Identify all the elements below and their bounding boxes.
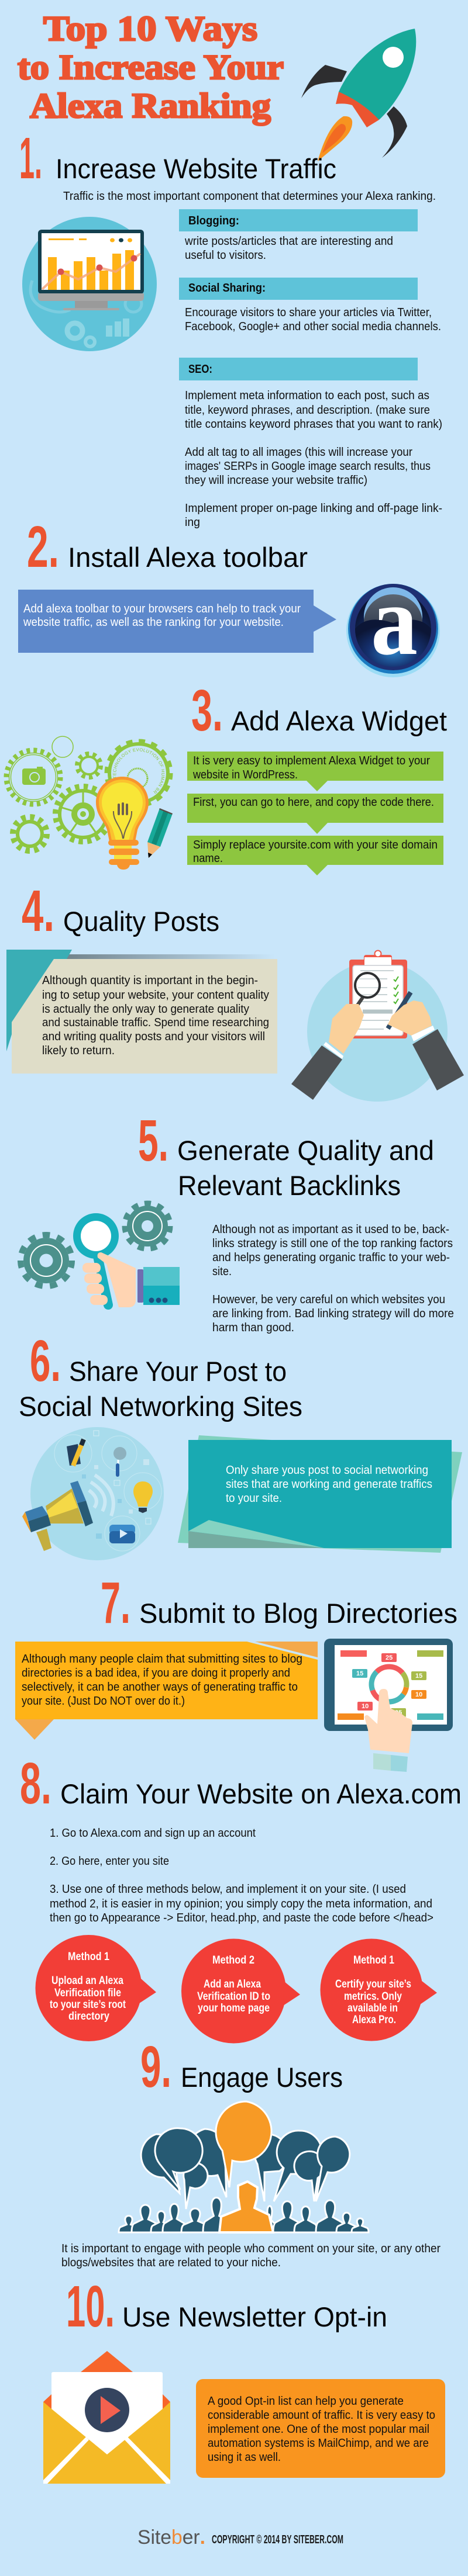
icon: envelope with video bbox=[43, 2351, 170, 2484]
heading: step 3 bbox=[191, 678, 447, 743]
panel: social sharing: Social Sharing: bbox=[188, 282, 266, 295]
callout: method 2 verification id: your home page bbox=[198, 2002, 270, 2014]
text: backlinks description: links strategy is still one of the top ranking factors bbox=[212, 1237, 453, 1250]
callout: method 2 verification id: Add an Alexa bbox=[204, 1978, 261, 1990]
heading: step 1 bbox=[19, 126, 336, 191]
callout: widget step 2: First, you can go to here, and copy the code there. bbox=[193, 796, 434, 809]
callout: method 1 certify: Certify your site’s bbox=[335, 1978, 411, 1990]
callout: install toolbar bbox=[18, 590, 336, 653]
callout: blog directories: your site. (Just Do NOT over do it.) bbox=[22, 1695, 185, 1708]
panel: quality posts note: likely to return. bbox=[42, 1044, 115, 1057]
heading: step 2: 2. bbox=[27, 514, 59, 580]
heading: step 9: 9. bbox=[140, 2034, 171, 2100]
heading: step 9: Engage Users bbox=[181, 2062, 343, 2093]
icon: tablet with chart and hand: 15 bbox=[415, 1673, 422, 1680]
text: backlinks description bbox=[212, 1223, 454, 1334]
footer: logo and copyright: Siteber. bbox=[137, 2526, 205, 2549]
text: engage users: blogs/websites that are related to your niche. bbox=[61, 2256, 281, 2269]
text: engage users: It is important to engage with people who comment on your site, or any other bbox=[61, 2242, 441, 2255]
callout: method 2 verification id bbox=[181, 1939, 300, 2043]
text: claim steps: then go to Appearance -> Editor, head.php, and paste the code before </head> bbox=[50, 1912, 433, 1924]
panel: quality posts note bbox=[6, 950, 277, 1074]
icon: gears and magnifier hand bbox=[20, 1203, 180, 1307]
icon: gears and light bulb bbox=[4, 736, 173, 870]
panel: quality posts note: Although quantity is important in the begin- bbox=[42, 974, 258, 987]
callout: opt-in: considerable amount of traffic. It is very easy to bbox=[208, 2409, 435, 2422]
callout: blog directories: directories is a bad idea, if you are doing it properly and bbox=[22, 1667, 290, 1680]
heading: step 6: 6. bbox=[30, 1328, 61, 1394]
callout: install toolbar: Add alexa toolbar to your browsers can help to track your bbox=[23, 603, 301, 615]
heading: step 5: Relevant Backlinks bbox=[178, 1170, 401, 1201]
panel: blogging: Blogging: bbox=[188, 214, 239, 227]
heading: step 1: 1. bbox=[19, 126, 42, 191]
callout: method 2 verification id: Verification ID to bbox=[197, 1990, 270, 2003]
heading: step 10: 10. bbox=[66, 2274, 115, 2339]
icon: megaphone with media icons bbox=[22, 1427, 164, 1560]
callout: method 1 upload: Upload an Alexa bbox=[51, 1975, 123, 1987]
heading: step 8 bbox=[20, 1751, 462, 1816]
text: claim steps: 3. Use one of three methods below, and implement it on your site. (I used bbox=[50, 1883, 406, 1896]
text: backlinks description: are linking from. Bad linking strategy will do more bbox=[212, 1307, 454, 1320]
callout: blog directories bbox=[15, 1642, 318, 1740]
heading: step 4: Quality Posts bbox=[63, 906, 219, 937]
text: backlinks description: and helps generating organic traffic to your web- bbox=[212, 1251, 450, 1264]
heading: step 7: 7. bbox=[101, 1570, 130, 1636]
text: backlinks description: Although not as important as it used to be, back- bbox=[212, 1223, 449, 1236]
callout: method 1 certify: Method 1 bbox=[353, 1954, 394, 1966]
callout: method 1 upload: Method 1 bbox=[68, 1951, 109, 1963]
heading: step 2 bbox=[27, 514, 308, 580]
callout: method 1 upload: to your site’s root bbox=[50, 1999, 126, 2011]
callout: widget step 3: name. bbox=[193, 852, 223, 865]
text: backlinks description: harm than good. bbox=[212, 1321, 294, 1334]
heading: step 3: Add Alexa Widget bbox=[231, 705, 447, 736]
heading: step 10: Use Newsletter Opt-in bbox=[122, 2301, 387, 2332]
icon: gears and light bulb: TECHNOLOGY EVOLUTION OF HUMAN BRAIN bbox=[113, 748, 165, 794]
footer: logo and copyright bbox=[137, 2526, 343, 2549]
callout: install toolbar: website traffic, as well as the ranking for your website. bbox=[23, 616, 284, 629]
text: claim steps: method 2, it is easier in my opinion; you simply copy the meta information, and bbox=[50, 1898, 432, 1910]
icon: tablet with chart and hand: 10 bbox=[362, 1703, 369, 1710]
panel: social sharing: Encourage visitors to share your articles via Twitter, bbox=[185, 306, 432, 319]
heading: step 9 bbox=[140, 2034, 343, 2100]
panel: blogging bbox=[179, 209, 418, 262]
callout: opt-in: implement one. One of the most popular mail bbox=[208, 2423, 429, 2436]
heading: step 5: Generate Quality and bbox=[177, 1135, 434, 1166]
callout: method 1 upload bbox=[35, 1935, 156, 2041]
callout: opt-in: A good Opt-in list can help you generate bbox=[208, 2395, 404, 2408]
callout: method 1 certify bbox=[321, 1939, 437, 2041]
icon: alexa logo: a bbox=[371, 566, 418, 676]
panel: seo: Add alt tag to all images (this will increase your bbox=[185, 446, 412, 459]
panel: share on social: Only share yous post to social networking bbox=[226, 1464, 428, 1477]
callout: method 1 certify: available in bbox=[347, 2002, 398, 2014]
icon: tablet with chart and hand: 25 bbox=[386, 1654, 393, 1661]
heading: step 2: Install Alexa toolbar bbox=[68, 542, 308, 573]
panel: social sharing: Facebook, Google+ and other social media channels. bbox=[185, 320, 441, 333]
callout: opt-in: automation systems is MailChimp, and we are bbox=[208, 2437, 429, 2450]
heading: step 3: 3. bbox=[191, 678, 223, 743]
text: claim steps bbox=[50, 1827, 433, 1924]
callout: blog directories: selectively, it can be another ways of generating traffic to bbox=[22, 1681, 298, 1694]
heading: step 5 bbox=[138, 1108, 434, 1201]
callout: method 1 upload: directory bbox=[68, 2010, 109, 2023]
callout: widget step 1: website in WordPress. bbox=[192, 768, 298, 781]
callout: blog directories: Although many people claim that submitting sites to blog bbox=[22, 1653, 302, 1666]
panel: seo bbox=[179, 358, 442, 529]
heading: step 8: Claim Your Website on Alexa.com bbox=[60, 1778, 462, 1809]
icon: tablet with chart and hand: 25 bbox=[395, 1709, 402, 1716]
panel: quality posts note: and sustainable traffic. Spend time researching bbox=[42, 1016, 269, 1029]
heading: step 1: Increase Website Traffic bbox=[56, 153, 336, 184]
icon: tablet with chart and hand bbox=[324, 1639, 453, 1772]
heading: step 6 bbox=[19, 1328, 302, 1422]
text: backlinks description: site. bbox=[212, 1265, 232, 1278]
panel: share on social: sites that are working and generate traffics bbox=[226, 1478, 432, 1491]
title: to Increase Your bbox=[18, 48, 284, 86]
panel: quality posts note: is actually the only way to generate quality bbox=[42, 1003, 249, 1016]
callout: opt-in: using it as well. bbox=[208, 2451, 281, 2464]
title: Top 10 Ways bbox=[43, 9, 257, 48]
panel: seo: Implement proper on-page linking and off-page link- bbox=[185, 502, 442, 515]
panel: quality posts note: and writing quality posts and your visitors will bbox=[42, 1030, 265, 1043]
panel: seo: title, keyword phrases, and description. (make sure bbox=[185, 404, 430, 417]
heading: step 7 bbox=[101, 1570, 457, 1636]
icon: tablet with chart and hand: 15 bbox=[356, 1670, 363, 1677]
callout: method 1 upload: Verification file bbox=[54, 1987, 121, 1999]
callout: widget step 1 bbox=[187, 752, 443, 791]
panel: seo: title contains keyword phrases that you want to rank) bbox=[185, 418, 442, 431]
text: claim steps: 2. Go here, enter you site bbox=[50, 1855, 169, 1868]
icon: monitor with chart bbox=[22, 217, 157, 351]
text: engage users bbox=[61, 2242, 441, 2269]
panel: quality posts note: ing to setup your website, your content quality bbox=[42, 989, 269, 1002]
panel: seo: SEO: bbox=[188, 363, 212, 376]
title: Alexa Ranking bbox=[30, 86, 271, 125]
callout: widget step 1: It is very easy to implement Alexa Widget to your bbox=[193, 754, 430, 767]
heading: step 4: 4. bbox=[22, 878, 54, 944]
panel: seo: Implement meta information to each post, such as bbox=[185, 389, 429, 402]
panel: seo: images' SERPs in Google image search results, thus bbox=[185, 460, 431, 473]
heading: step 7: Submit to Blog Directories bbox=[139, 1598, 457, 1629]
panel: seo: ing bbox=[185, 516, 200, 529]
panel: share on social bbox=[178, 1435, 462, 1553]
panel: social sharing bbox=[179, 278, 441, 333]
callout: widget step 3: Simply replace yoursite.com with your site domain bbox=[193, 839, 438, 851]
callout: widget step 3 bbox=[187, 836, 443, 875]
icon: hands with clipboard bbox=[291, 950, 464, 1102]
heading: step 8: 8. bbox=[20, 1751, 51, 1816]
text: step 1 intro: Traffic is the most important component that determines your Alexa ranking. bbox=[63, 190, 436, 203]
heading: step 6: Share Your Post to bbox=[69, 1356, 287, 1387]
icon: rocket bbox=[301, 29, 416, 161]
callout: method 1 certify: Alexa Pro. bbox=[352, 2014, 396, 2026]
heading: step 10 bbox=[66, 2274, 387, 2339]
text: backlinks description: However, be very careful on which websites you bbox=[212, 1293, 445, 1306]
panel: blogging: useful to visitors. bbox=[185, 249, 266, 262]
panel: seo: they will increase your website traffic) bbox=[185, 474, 367, 487]
title bbox=[18, 9, 284, 125]
icon: tablet with chart and hand: 10 bbox=[415, 1691, 422, 1698]
panel: share on social: to your site. bbox=[226, 1492, 282, 1505]
icon: crowd with speech bubbles bbox=[119, 2101, 369, 2232]
icon: alexa logo bbox=[346, 566, 440, 677]
callout: widget step 2 bbox=[187, 794, 443, 834]
callout: method 1 certify: metrics. Only bbox=[344, 1990, 402, 2003]
callout: opt-in bbox=[196, 2379, 445, 2478]
heading: step 5: 5. bbox=[138, 1108, 168, 1173]
heading: step 4 bbox=[22, 878, 219, 944]
text: claim steps: 1. Go to Alexa.com and sign up an account bbox=[50, 1827, 256, 1840]
callout: method 2 verification id: Method 2 bbox=[212, 1954, 254, 1966]
footer: logo and copyright: COPYRIGHT © 2014 BY SITEBER.COM bbox=[212, 2533, 343, 2546]
heading: step 6: Social Networking Sites bbox=[19, 1391, 302, 1422]
panel: blogging: write posts/articles that are interesting and bbox=[184, 235, 393, 248]
